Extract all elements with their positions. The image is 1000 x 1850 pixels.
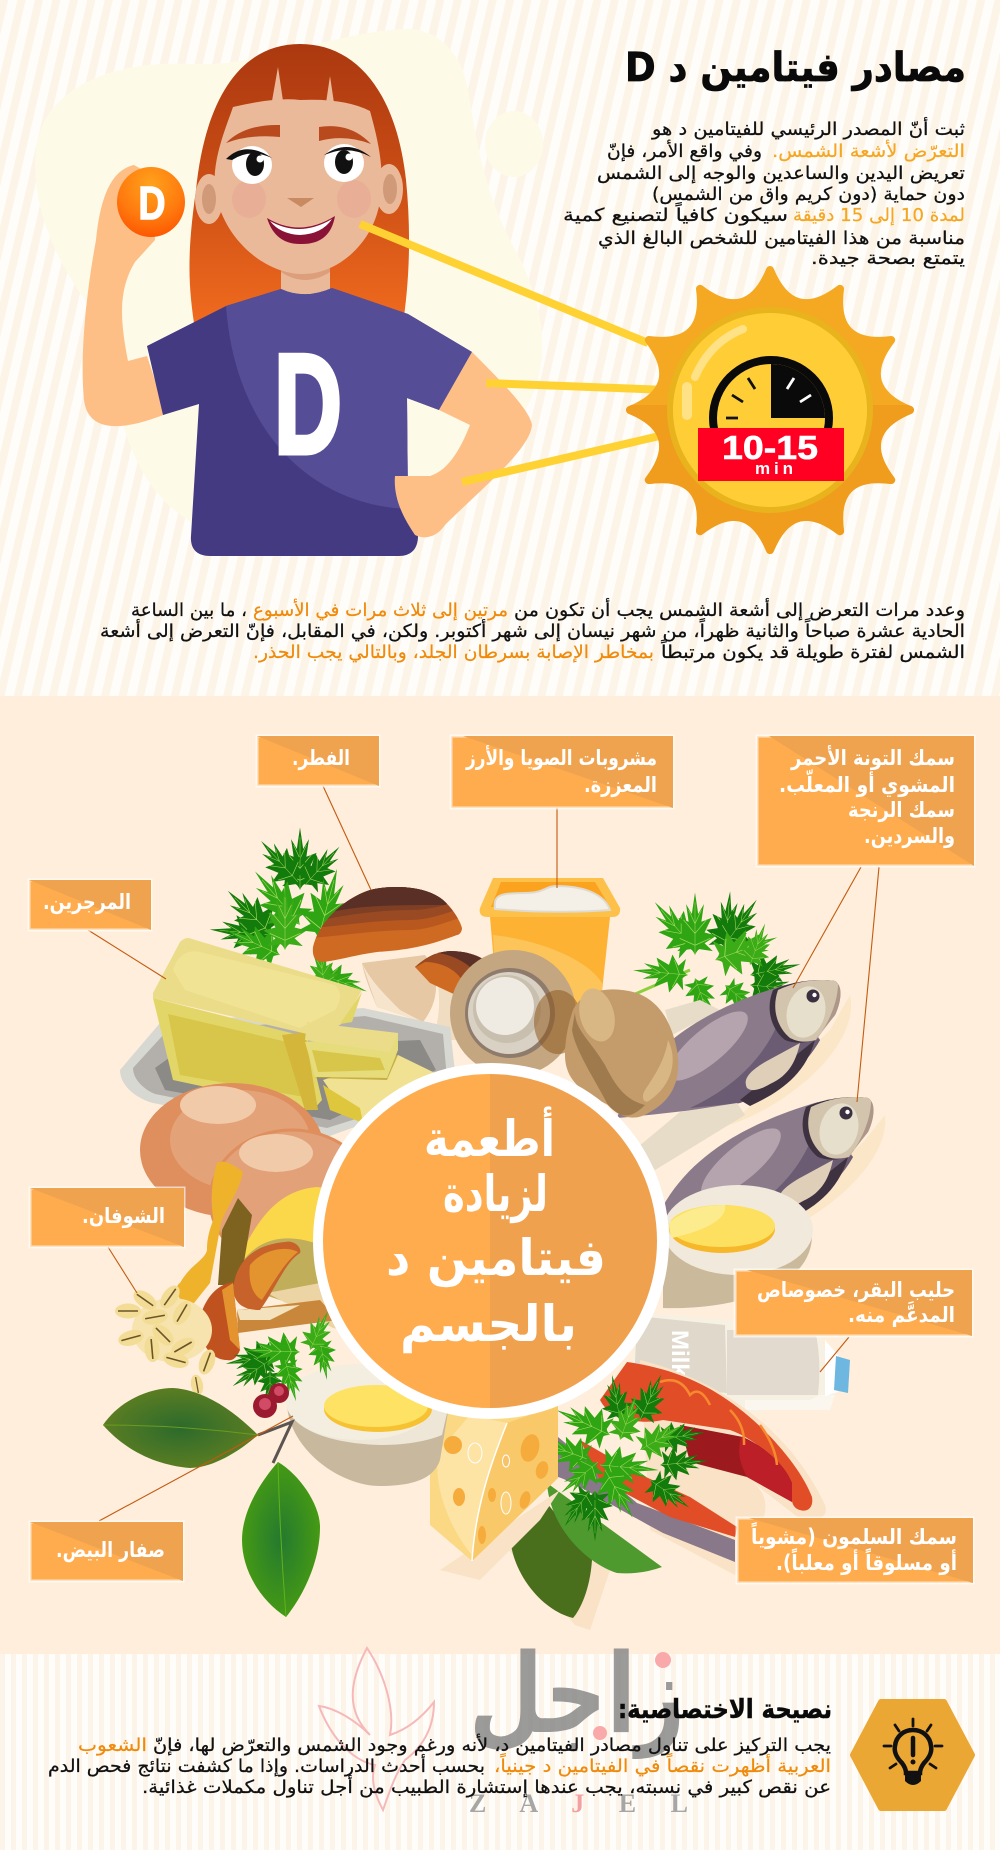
- smile: [267, 216, 335, 244]
- left leaf: [103, 1388, 258, 1468]
- clock: [709, 356, 833, 480]
- central circle with title: أطعمة: [424, 1106, 555, 1168]
- label: tuna and herring: سمك التونة الأحمر: [790, 744, 955, 770]
- intro paragraph: دون حماية (دون كريم واق من الشمس): [652, 184, 965, 205]
- hair: [189, 44, 409, 330]
- connector lines: [88, 786, 879, 1521]
- red berries: [253, 1383, 289, 1418]
- label: soy and rice drinks: مشروبات الصويا والأرز: [465, 744, 657, 770]
- label: oats: الشوفان.: [82, 1204, 165, 1228]
- tip paragraph: الشعوب: [78, 1735, 147, 1756]
- intro paragraph: مناسبة من هذا الفيتامين للشخص البالغ الذي: [598, 228, 965, 249]
- parsley bottom: [535, 1367, 709, 1542]
- small margarine piece: [305, 1022, 398, 1078]
- label: tuna and herring: [757, 736, 974, 866]
- brown cap: [565, 985, 678, 1118]
- tray: [120, 1008, 457, 1137]
- ears: [195, 164, 403, 224]
- central circle with title: بالجسم: [400, 1295, 577, 1353]
- cheese: [430, 1405, 560, 1580]
- yellow chanterelle cap: [238, 1187, 345, 1300]
- intro paragraph: ثبت أنّ المصدر الرئيسي للفيتامين د هو: [651, 117, 965, 140]
- background blob behind character: [35, 29, 543, 522]
- label: cow milk: المدعَّم منه.: [848, 1301, 955, 1327]
- eyes: [226, 144, 371, 184]
- t-shirt: [147, 288, 472, 556]
- central circle with title: لزيادة: [443, 1165, 548, 1224]
- intro paragraph: تعريض اليدين والساعدين والوجه إلى الشمس: [597, 163, 965, 184]
- intro paragraph: [563, 117, 965, 269]
- face: [215, 67, 382, 274]
- second paragraph: ، ما بين الساعة: [131, 600, 247, 621]
- raised left arm: [83, 165, 166, 426]
- label: cow milk: حليب البقر، خصوصاص: [757, 1278, 955, 1302]
- milk carton: [630, 1313, 850, 1420]
- central circle with title: فيتامين د: [386, 1229, 606, 1288]
- label: salmon: سمك السلمون (مشوياً: [751, 1521, 957, 1549]
- food illustration: [103, 827, 885, 1630]
- mushroom stems: [267, 1283, 345, 1330]
- intro paragraph: سيكون كافياً لتصنيع كمية: [563, 202, 788, 226]
- label: salmon: [737, 1518, 973, 1583]
- eyebrows: [226, 125, 371, 144]
- vitamin D capsule: D: [138, 177, 166, 229]
- sun with timer: [630, 270, 910, 550]
- label: egg yolk: [30, 1522, 183, 1581]
- twig: [258, 1422, 292, 1463]
- salmon steak: [558, 1360, 826, 1575]
- tip paragraph: بحسب أحدث الدراسات. وإذا ما كشفت نتائج فحص الدم: [48, 1754, 485, 1777]
- second paragraph: بمخاطر الإصابة بسرطان الجلد، وبالتالي يجب الحذر.: [253, 642, 654, 663]
- red time label: min: [755, 459, 793, 478]
- neck: [281, 262, 330, 298]
- margarine block: [153, 938, 362, 1110]
- tip paragraph: العربية أظهرت نقصاً في الفيتامين د جينياً،: [494, 1753, 831, 1777]
- tip paragraph: [48, 1734, 831, 1798]
- label: soy and rice drinks: المعززة.: [584, 773, 657, 797]
- yogurt cup: [480, 878, 620, 1010]
- margarine slice: [315, 1055, 435, 1123]
- intro paragraph: يتمتع بصحة جيدة.: [811, 248, 965, 269]
- second paragraph: مرتين إلى ثلاث مرات في الأسبوع: [253, 599, 508, 621]
- label: tuna and herring: سمك الرنجة: [848, 798, 955, 822]
- olive underside: [218, 1198, 252, 1285]
- label: oats: [30, 1188, 184, 1247]
- red time label: [698, 428, 844, 481]
- big mushroom cap: [312, 887, 462, 962]
- small mushroom: [415, 951, 482, 1040]
- parsley lower left: [223, 1305, 341, 1407]
- second paragraph: الحادية عشرة صباحاً والثانية ظهراً، من شهر نيسان إلى شهر أكتوبر. ولكن، في المقابل، فإنّ التعرض إلى أشعة: [100, 618, 965, 642]
- second paragraph: الشمس لفترة طويلة قد يكون مرتبطاً: [660, 639, 965, 663]
- bottom leaf: [242, 1462, 320, 1617]
- central circle with title: [313, 1063, 669, 1419]
- character: girl with vitamin D: [83, 44, 532, 556]
- label: soy and rice drinks: [451, 736, 673, 808]
- fish top: [617, 980, 851, 1125]
- sun rays to skin: [360, 224, 668, 482]
- background: striped bottom section: [0, 1654, 1000, 1850]
- nose: [287, 198, 314, 207]
- parsley top right: [631, 888, 804, 1025]
- boiled egg right: [663, 1185, 813, 1308]
- background: striped top section: [0, 0, 1000, 696]
- label: egg yolk: صفار البيض.: [56, 1538, 165, 1562]
- label: mushrooms: الفطر.: [292, 746, 350, 770]
- tip paragraph: يجب التركيز على تناول مصادر الفيتامين د، لأنه ورغم وجود الشمس والتعرّض لها، فإنّ: [153, 1734, 831, 1756]
- orange ridge: [177, 1162, 243, 1308]
- intro paragraph: لمدة 10 إلى 15 دقيقة: [793, 205, 965, 226]
- label: margarine: [29, 880, 151, 930]
- label: margarine: المرجرين.: [43, 890, 131, 914]
- left mushrooms and chanterelle: [177, 1162, 350, 1360]
- intro paragraph: التعرّض لأشعة الشمس.: [772, 140, 965, 162]
- oats: [115, 1282, 218, 1396]
- red time label: 10-15: [722, 429, 818, 466]
- watermark: Zajel logo: [319, 1630, 688, 1818]
- label: salmon: أو مسلوقاً أو معلباً).: [776, 1547, 957, 1575]
- clam shell: [450, 950, 582, 1076]
- milk carton: Milk: [666, 1330, 693, 1377]
- tip heading: نصيحة الاختصاصية:: [618, 1695, 832, 1725]
- vitamin D capsule: [117, 167, 185, 237]
- tip paragraph: عن نقص كبير في نسبته، يجب عندها إستشارة الطبيب من أجل تناول مكملات غذائية.: [142, 1775, 831, 1798]
- title: مصادر فيتامين د D: [625, 45, 966, 91]
- intro paragraph: وفي واقع الأمر، فإنّ: [607, 140, 762, 162]
- icon: lightbulb hexagon: [853, 1702, 972, 1808]
- mushroom caps: [233, 1242, 300, 1310]
- watermark: Zajel logo: زاجل: [469, 1630, 685, 1759]
- parsley top left: [208, 827, 373, 1007]
- watermark: Zajel logo: Z A J E L: [469, 1789, 688, 1818]
- t-shirt: D: [274, 325, 342, 484]
- bay leaves under cheese: [500, 1483, 662, 1630]
- second paragraph: وعدد مرات التعرض إلى أشعة الشمس يجب أن تكون من: [514, 598, 965, 621]
- big mushroom stem: [362, 955, 436, 1022]
- boiled egg left: [286, 1364, 450, 1486]
- right arm on hip: [395, 352, 532, 537]
- eggs: [140, 1083, 374, 1270]
- label: mushrooms: [257, 736, 379, 786]
- label: tuna and herring: والسردين.: [864, 824, 955, 848]
- second paragraph: [100, 598, 965, 663]
- fish bottom: [638, 1097, 885, 1240]
- label: tuna and herring: المشوي أو المعلّب.: [779, 768, 955, 798]
- background: peach food section: [0, 696, 1000, 1654]
- label: cow milk: [735, 1270, 972, 1336]
